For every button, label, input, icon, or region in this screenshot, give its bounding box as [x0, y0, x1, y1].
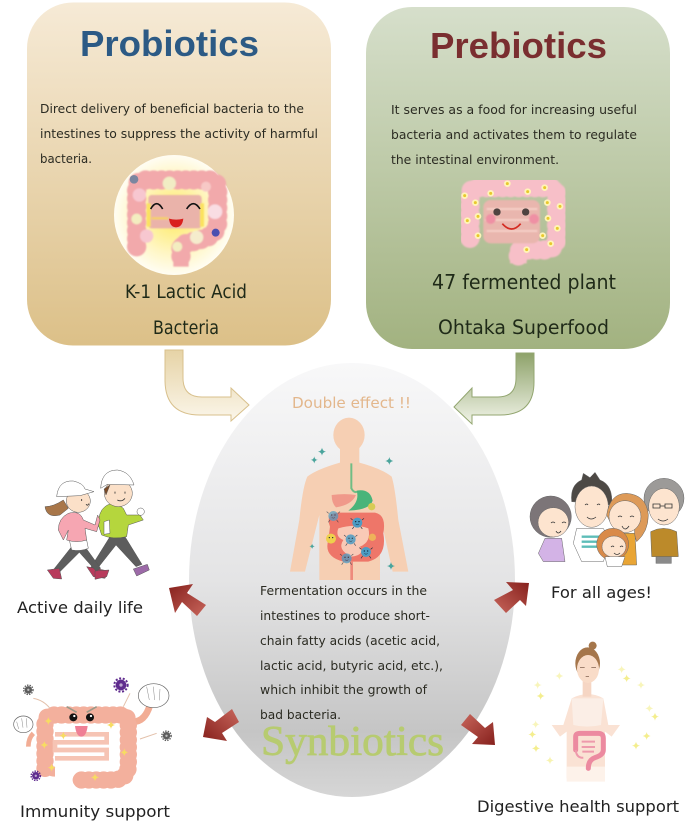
heading: probiotics: Probiotics [80, 23, 259, 64]
text: fermentation explanation: intestines to produce short- [260, 609, 430, 623]
illustration: strong intestine with germs [14, 678, 171, 781]
text: fermentation explanation: lactic acid, butyric acid, etc.), [260, 659, 443, 673]
panel: probiotics [27, 2, 331, 346]
arrow: to active daily life [169, 584, 206, 616]
arrow: to digestive health support [461, 714, 495, 745]
description: probiotics: intestines to suppress the activity of harmful [40, 127, 318, 141]
label: immunity support: Immunity support [20, 802, 170, 821]
text: fermentation explanation: which inhibit the growth of [260, 683, 428, 697]
icon: happy intestine with yellow bacteria [461, 180, 563, 263]
arrow: to immunity support [203, 709, 239, 741]
text: fermentation explanation: chain fatty acids (acetic acid, [260, 634, 440, 648]
description: prebiotics: It serves as a food for increasing useful [391, 103, 637, 117]
label: active daily life: Active daily life [17, 598, 143, 617]
arrow: to for all ages [494, 582, 529, 613]
label: digestive health support: Digestive health support [477, 797, 679, 816]
arrow: probiotics to synbiotics [165, 350, 249, 421]
panel: prebiotics [366, 7, 670, 349]
heading: double effect: Double effect !! [292, 394, 411, 412]
description: probiotics [40, 102, 318, 166]
heading: prebiotics: Prebiotics [430, 25, 607, 66]
heading: synbiotics: Synbiotics [261, 719, 444, 765]
panel: synbiotics oval [189, 363, 515, 797]
text: fermentation explanation: Fermentation occurs in the [260, 584, 427, 598]
label: 47 fermented plant: 47 fermented plant [432, 270, 616, 294]
description: prebiotics: the intestinal environment. [391, 153, 559, 167]
illustration: couple walking [45, 470, 149, 579]
label: Ohtaka Superfood: Ohtaka Superfood [438, 316, 609, 339]
description: probiotics: Direct delivery of beneficial bacteria to the [40, 102, 304, 116]
faces: family features [551, 504, 672, 554]
label: K-1 lactic acid: K-1 Lactic Acid [125, 282, 247, 303]
arrow: prebiotics to synbiotics [454, 353, 534, 424]
icon: human body with gut bacteria [290, 418, 408, 580]
text: fermentation explanation [260, 584, 443, 722]
illustration: woman with healthy gut [528, 642, 659, 782]
label: bacteria: Bacteria [153, 318, 219, 339]
label: for all ages: For all ages! [551, 583, 652, 602]
icon: smiling intestine in circle [114, 155, 234, 275]
description: prebiotics [391, 103, 637, 167]
description: probiotics: bacteria. [40, 152, 92, 166]
illustration: family of all ages [530, 472, 684, 567]
text: fermentation explanation: bad bacteria. [260, 708, 341, 722]
description: prebiotics: bacteria and activates them to regulate [391, 128, 637, 142]
